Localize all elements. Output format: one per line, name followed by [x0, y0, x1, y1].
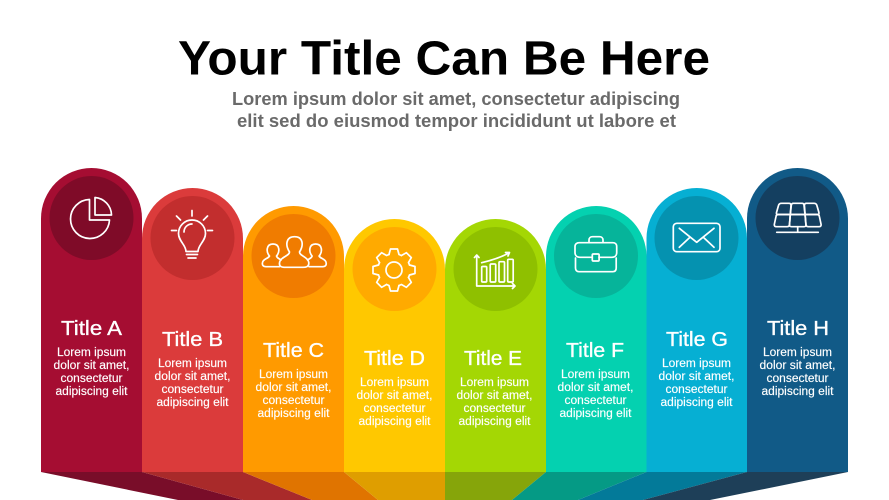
- text: body D: consectetur: [364, 403, 426, 415]
- text: body F: adipiscing elit: [560, 408, 632, 420]
- text: body F: dolor sit amet,: [558, 382, 634, 394]
- text: body E: [456, 377, 532, 428]
- text: body A: Lorem ipsum: [57, 347, 126, 359]
- text: body A: consectetur: [60, 373, 123, 385]
- subtitle: [232, 88, 680, 131]
- text: body G: consectetur: [666, 384, 728, 396]
- heading: Title F: Title F: [566, 339, 624, 362]
- icon: briefcase: [575, 237, 617, 272]
- text: body B: [154, 358, 230, 409]
- text: body H: Lorem ipsum: [763, 347, 832, 359]
- text: body H: adipiscing elit: [762, 386, 834, 398]
- heading: Title D: Title D: [364, 347, 425, 370]
- panel: Title D: [344, 219, 445, 500]
- text: body A: dolor sit amet,: [54, 360, 130, 372]
- heading: Title A: Title A: [61, 317, 122, 340]
- text: body A: [54, 347, 130, 398]
- text: body G: [658, 358, 734, 409]
- text: body A: adipiscing elit: [56, 386, 128, 398]
- text: body H: [760, 347, 836, 398]
- icon: envelope: [673, 223, 720, 252]
- text: body C: Lorem ipsum: [259, 369, 328, 381]
- icon: solar panel: [774, 203, 821, 232]
- panel: Title C: [243, 206, 378, 500]
- text: body H: dolor sit amet,: [760, 360, 836, 372]
- text: body F: [558, 369, 634, 420]
- text: body D: dolor sit amet,: [356, 390, 432, 402]
- text: body C: consectetur: [262, 395, 325, 407]
- text: body C: [256, 369, 332, 420]
- text: body B: adipiscing elit: [156, 397, 229, 409]
- text: body H: consectetur: [766, 373, 829, 385]
- text: body C: adipiscing elit: [258, 408, 330, 420]
- text: body G: adipiscing elit: [660, 397, 733, 409]
- subtitle: Lorem ipsum dolor sit amet, consectetur adipiscing: [232, 88, 680, 109]
- subtitle: elit sed do eiusmod tempor incididunt ut labore et: [237, 110, 676, 131]
- text: body B: consectetur: [162, 384, 224, 396]
- heading: Title B: Title B: [162, 328, 223, 351]
- panel: Title H: [643, 168, 848, 500]
- text: body F: consectetur: [564, 395, 627, 407]
- heading: Title G: Title G: [666, 328, 728, 351]
- text: body D: Lorem ipsum: [360, 377, 429, 389]
- heading: Title H: Title H: [767, 317, 829, 340]
- text: body E: dolor sit amet,: [456, 390, 532, 402]
- text: body B: dolor sit amet,: [154, 371, 230, 383]
- text: body B: Lorem ipsum: [158, 358, 227, 370]
- title: Your Title Can Be Here: [178, 32, 710, 86]
- heading: Title E: Title E: [464, 347, 522, 370]
- icon: light bulb: [172, 210, 212, 258]
- icon: pie chart: [71, 198, 112, 238]
- icon: gear: [373, 249, 415, 291]
- icon: people: [262, 237, 326, 267]
- panel: Title E: [445, 219, 546, 500]
- icon: growth chart: [474, 252, 515, 288]
- panel: Title B: [142, 188, 312, 500]
- text: body D: adipiscing elit: [358, 416, 431, 428]
- text: body G: Lorem ipsum: [662, 358, 731, 370]
- panel: Title F: [512, 206, 646, 500]
- text: body E: consectetur: [464, 403, 526, 415]
- text: body E: adipiscing elit: [458, 416, 531, 428]
- text: body C: dolor sit amet,: [256, 382, 332, 394]
- text: body E: Lorem ipsum: [460, 377, 529, 389]
- heading: Title C: Title C: [263, 339, 324, 362]
- panel: Title A: [41, 168, 243, 500]
- text: body G: dolor sit amet,: [658, 371, 734, 383]
- text: body D: [356, 377, 432, 428]
- panel: Title G: [578, 188, 747, 500]
- text: body F: Lorem ipsum: [561, 369, 630, 381]
